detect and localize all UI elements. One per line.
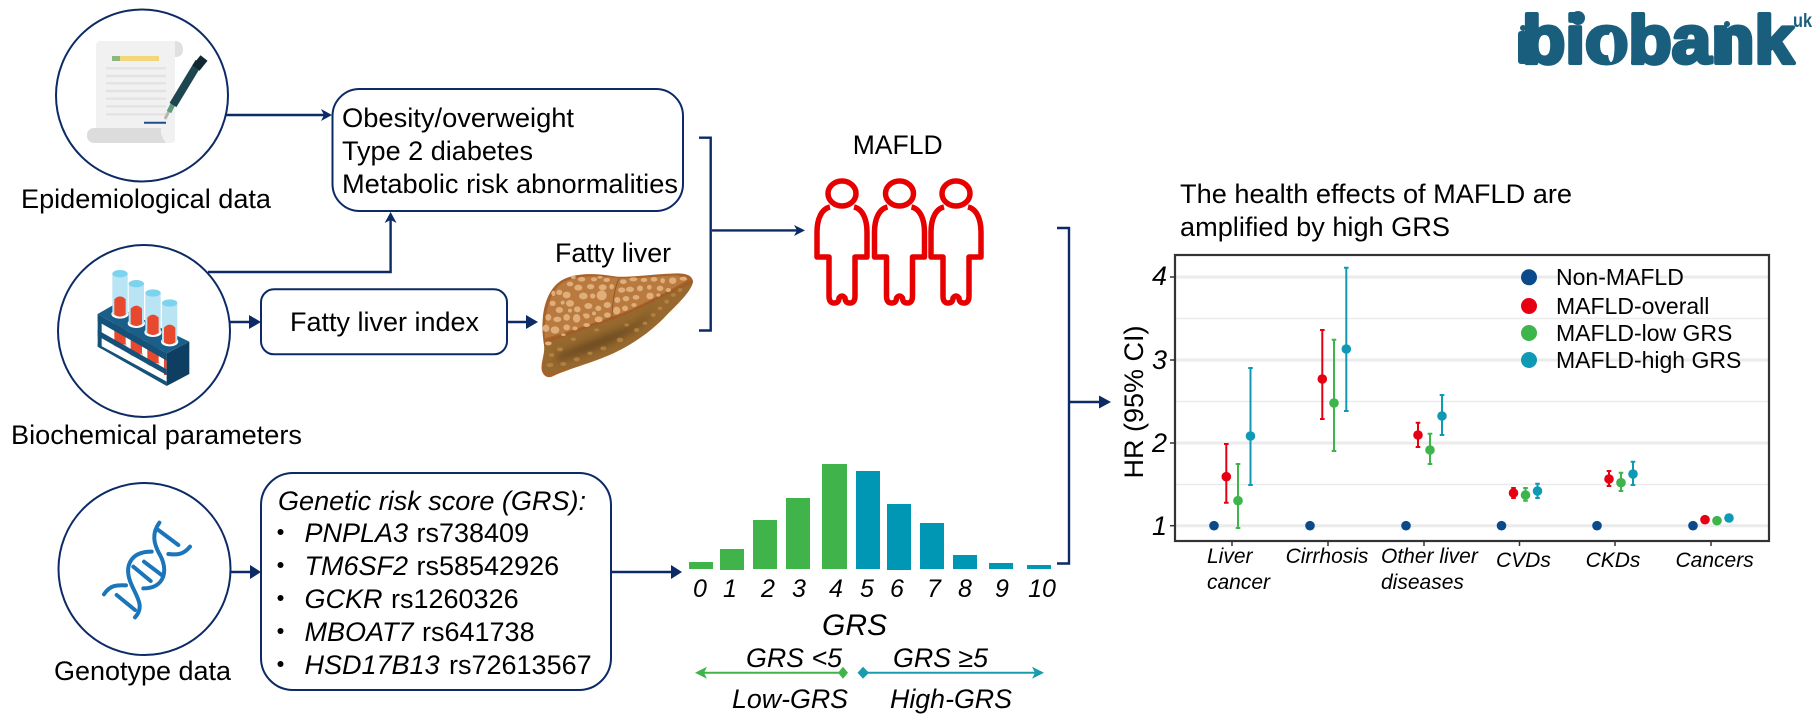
legend: MAFLD-high GRS	[1556, 347, 1741, 373]
label: genotype data: Genotype data	[54, 656, 232, 686]
bar chart: GRS distribution: 7	[927, 575, 942, 603]
panel: genetic risk score: rs1260326	[391, 584, 519, 614]
label: GRS at least 5: GRS ≥5	[893, 643, 989, 673]
label: fatty liver: Fatty liver	[555, 238, 671, 268]
x axis categories: Other liver	[1381, 545, 1479, 568]
x axis categories: cancer	[1207, 571, 1271, 594]
label: low GRS: Low-GRS	[732, 684, 848, 714]
arrow: GRS box to histogram	[611, 565, 682, 579]
panel: genetic risk score: rs738409	[416, 518, 529, 548]
chart title: amplified by high GRS	[1180, 212, 1450, 242]
x axis categories: CKDs	[1586, 549, 1641, 572]
arrow: to health effects chart	[1068, 396, 1111, 408]
arrow: genotype data to GRS box	[231, 565, 261, 579]
label: high GRS: High-GRS	[890, 684, 1012, 714]
bar chart: GRS distribution: 6	[890, 575, 904, 603]
legend: MAFLD-low GRS	[1556, 320, 1732, 346]
bar chart: GRS distribution: 4	[829, 575, 843, 603]
logo: UK Biobank: uk	[1793, 11, 1812, 32]
label: epidemiological data: Epidemiological data	[21, 184, 272, 214]
panel: fatty liver index: Fatty liver index	[290, 307, 479, 337]
bar chart: GRS distribution: 3	[792, 575, 806, 603]
icon: epidemiological data circle	[56, 10, 228, 182]
chart: hazard ratios with confidence intervals: 2	[1151, 428, 1167, 458]
panel: fatty liver index	[261, 289, 507, 354]
bar chart: GRS distribution: 1	[723, 575, 737, 603]
x axis categories: Liver	[1207, 545, 1254, 568]
panel: genetic risk score: MBOAT7	[304, 617, 414, 647]
arrow: to MAFLD	[712, 225, 805, 236]
icon: three people in red	[817, 181, 981, 303]
bar chart: GRS distribution: 8	[958, 575, 972, 603]
panel: genetic risk score: rs72613567	[449, 650, 592, 680]
arrow: fatty liver index to liver	[507, 315, 538, 329]
panel: genetic risk score: Genetic risk score (GRS):	[278, 486, 586, 516]
axis title: GRS: GRS	[822, 609, 887, 642]
logo: UK Biobank: biobank	[1522, 2, 1794, 78]
legend: Non-MAFLD	[1556, 264, 1684, 290]
icon: genotype data DNA circle	[58, 483, 230, 655]
series: MAFLD-low GRS	[1233, 340, 1722, 528]
panel: metabolic risk factors: Metabolic risk abnormalities	[342, 169, 678, 199]
x axis categories: diseases	[1381, 571, 1464, 594]
arrow: low GRS range	[695, 667, 848, 679]
x axis categories: Cancers	[1676, 549, 1754, 572]
x axis categories: Cirrhosis	[1286, 545, 1369, 568]
bracket: MAFLD and GRS	[1057, 228, 1069, 564]
bar chart: GRS distribution: 5	[860, 575, 874, 603]
panel: genetic risk score: PNPLA3	[304, 518, 408, 548]
x axis categories	[1207, 545, 1754, 594]
panel: genetic risk score: HSD17B13	[304, 650, 440, 680]
series: MAFLD-overall	[1222, 330, 1710, 524]
icon: biochemical parameters test tubes	[58, 245, 230, 417]
panel: metabolic risk factors: Obesity/overweight	[342, 103, 574, 133]
panel: genetic risk score	[261, 473, 611, 690]
panel: genetic risk score: rs58542926	[416, 551, 559, 581]
arrow: biochemical parameters up to risk box	[208, 212, 397, 272]
arrow: epidemiological data to risk box	[226, 109, 332, 121]
bar chart: GRS distribution: 0	[693, 575, 707, 603]
legend	[1521, 264, 1741, 373]
panel: genetic risk score: TM6SF2	[304, 551, 408, 581]
bracket: risk factors and fatty liver	[699, 138, 711, 330]
bar chart: GRS distribution: 2	[760, 575, 775, 603]
label: biochemical parameters: Biochemical parameters	[11, 420, 302, 450]
panel: genetic risk score: rs641738	[422, 617, 535, 647]
chart: hazard ratios with confidence intervals	[1119, 255, 1769, 594]
label: MAFLD: MAFLD	[853, 130, 943, 160]
chart: hazard ratios with confidence intervals: HR (95% CI)	[1119, 325, 1149, 479]
chart: hazard ratios with confidence intervals: 3	[1152, 345, 1167, 375]
arrow: high GRS range	[858, 667, 1044, 679]
panel: genetic risk score: GCKR	[304, 584, 383, 614]
chart: hazard ratios with confidence intervals: 1	[1152, 511, 1167, 541]
bar chart: GRS distribution	[689, 464, 1056, 603]
label: GRS below 5: GRS <5	[746, 643, 843, 673]
chart title	[1180, 179, 1572, 242]
arrow: biochemical parameters to fatty liver index	[230, 315, 261, 329]
chart title: The health effects of MAFLD are	[1180, 179, 1572, 209]
panel: metabolic risk factors: Type 2 diabetes	[342, 136, 533, 166]
bar chart: GRS distribution: 10	[1028, 575, 1056, 603]
bar chart: GRS distribution: 9	[995, 575, 1009, 603]
icon: fatty liver	[542, 273, 693, 377]
x axis categories: CVDs	[1496, 549, 1551, 572]
series: non-MAFLD	[1209, 521, 1698, 530]
panel: metabolic risk factors	[332, 89, 683, 211]
legend: MAFLD-overall	[1556, 293, 1709, 319]
chart: hazard ratios with confidence intervals: 4	[1152, 261, 1167, 291]
series: MAFLD-high GRS	[1246, 268, 1734, 523]
